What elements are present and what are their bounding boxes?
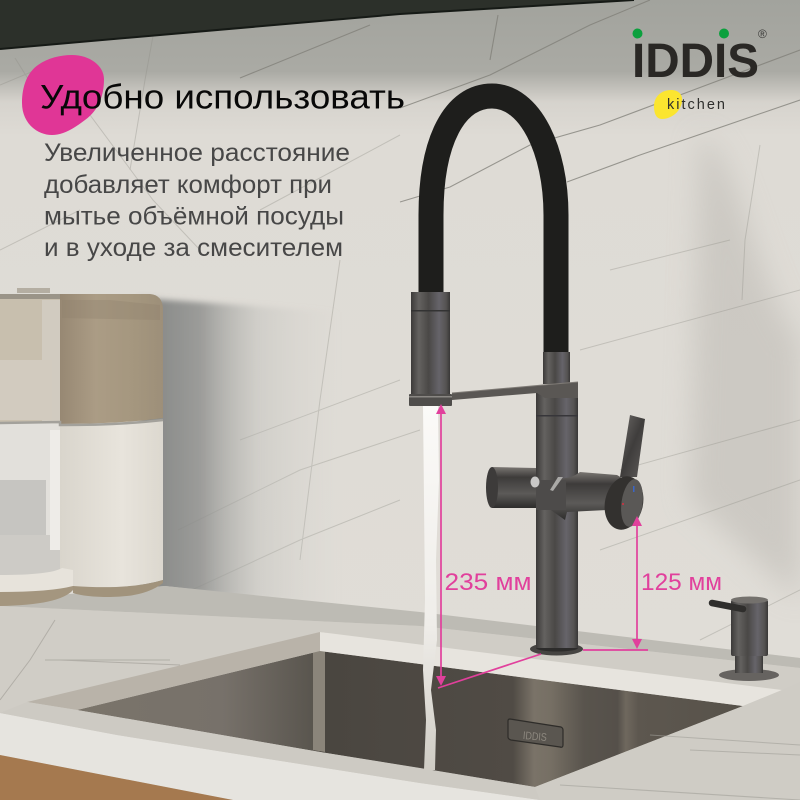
crossbar valve bbox=[486, 467, 622, 520]
glass jar lower bbox=[0, 423, 62, 575]
sprayer head bbox=[409, 292, 452, 406]
lever handle bbox=[620, 415, 645, 477]
dispenser nozzle bbox=[712, 603, 743, 609]
counter surface right of sink bbox=[535, 682, 800, 800]
jar lid bbox=[17, 288, 50, 293]
logo: iddis kitchen bbox=[632, 27, 767, 119]
heading blob bbox=[22, 55, 104, 135]
logo wordmark: IDDIS bbox=[632, 35, 759, 88]
dimension: 125 mm: 125 мм bbox=[641, 569, 722, 596]
sink right wall bbox=[320, 651, 743, 787]
yellow blob bbox=[654, 90, 682, 119]
description text: Увеличенное расстояние bbox=[44, 139, 350, 167]
sink left wall bbox=[77, 651, 320, 752]
handle cap bbox=[600, 473, 648, 533]
counter surface in front of sink bbox=[0, 702, 540, 800]
description text bbox=[44, 139, 350, 262]
dispenser neck bbox=[735, 655, 763, 673]
dispenser body bbox=[731, 600, 768, 656]
sprayer arm bbox=[452, 382, 578, 400]
jar plinth bbox=[0, 568, 73, 592]
sink logo plate bbox=[508, 719, 563, 747]
description text: мытье объёмной посуды bbox=[44, 202, 344, 230]
description text: добавляет комфорт при bbox=[44, 171, 332, 199]
counter cutout rim bbox=[27, 632, 440, 710]
white base bbox=[60, 420, 163, 587]
heading: Удобно использовать bbox=[40, 78, 405, 116]
kitchen appliance bbox=[0, 288, 163, 606]
sink corner seam bbox=[313, 651, 325, 752]
glass jar upper bbox=[0, 298, 62, 423]
taupe base strip bbox=[73, 580, 163, 597]
sink bbox=[0, 632, 800, 800]
faucet body column bbox=[536, 392, 578, 646]
water stream bbox=[423, 406, 439, 770]
beige tank bbox=[60, 294, 163, 424]
faucet bbox=[409, 96, 648, 656]
wood cabinet front bbox=[0, 755, 233, 800]
registered mark: ® bbox=[758, 27, 767, 41]
countertop front edge bbox=[0, 713, 540, 800]
soap dispenser bbox=[712, 596, 779, 681]
faucet base flange bbox=[530, 642, 583, 656]
dimension: 235 mm: 235 мм bbox=[444, 569, 532, 596]
countertop bbox=[0, 586, 800, 800]
metal divider bbox=[0, 420, 163, 425]
black flexible hose bbox=[431, 96, 556, 354]
dispenser base plate bbox=[719, 669, 779, 681]
dimension: 125 mm bbox=[583, 516, 722, 650]
appliance shadow on wall bbox=[140, 298, 340, 606]
sink logo plate: IDDIS bbox=[522, 730, 547, 744]
kitchen label: kitchen bbox=[667, 97, 725, 113]
dimension: 235 mm bbox=[436, 404, 541, 688]
logo dots bbox=[632, 28, 729, 38]
neck collar bbox=[543, 352, 570, 384]
dark wall cabinet bbox=[0, 0, 634, 49]
description text: и в уходе за смесителем bbox=[44, 234, 343, 262]
